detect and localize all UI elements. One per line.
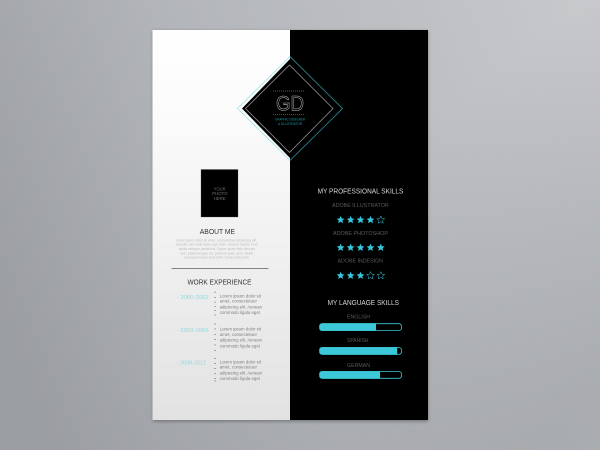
about me text bbox=[176, 238, 258, 260]
job text: first: adipiscing elit. Aenean bbox=[220, 304, 262, 310]
paper shadow bbox=[153, 31, 428, 422]
job text: third: commodo ligula eget bbox=[220, 376, 261, 382]
job text: third bbox=[220, 359, 262, 382]
job text: second: commodo ligula eget bbox=[220, 343, 261, 349]
about me text: Lorem ipsum dolor sit amet, consectetuer adipiscing elit. bbox=[176, 238, 257, 242]
logo tagline: GRAPHIC DESIGNER bbox=[275, 118, 306, 122]
logo diamond: & ILLUSTRATOR bbox=[278, 122, 303, 126]
stars: illustrator 4 of 5 bbox=[337, 216, 385, 223]
heading: about me: ABOUT ME bbox=[200, 227, 235, 236]
bar: german bbox=[319, 371, 402, 379]
photo placeholder: HERE bbox=[214, 196, 226, 201]
label: adobe photoshop: ADOBE PHOTOSHOP bbox=[333, 231, 388, 237]
stars: photoshop 5 of 5 bbox=[337, 244, 385, 251]
label: adobe illustrator: ADOBE ILLUSTRATOR bbox=[332, 203, 389, 209]
stars: indesign 3 of 5 bbox=[337, 272, 385, 279]
about me text: sociis natoque penatibus. Donec quam felis ultricies bbox=[179, 247, 255, 251]
job text: third: adipiscing elit. Aenean bbox=[220, 370, 262, 376]
job text: third: amet, consectetuer bbox=[220, 365, 257, 371]
job text: second: amet, consectetuer bbox=[220, 332, 257, 338]
about me text: nec, pellentesque eu, pretium quis, sem. Nulla bbox=[180, 251, 253, 255]
job text: first: Lorem ipsum dolor sit bbox=[220, 293, 262, 299]
label: spanish: SPANISH bbox=[347, 338, 368, 344]
job text: second bbox=[220, 327, 262, 349]
heading: professional skills: MY PROFESSIONAL SKILLS bbox=[318, 186, 404, 196]
label: german: GERMAN bbox=[347, 363, 370, 369]
label: english: ENGLISH bbox=[347, 314, 370, 320]
bar: english bbox=[319, 323, 402, 331]
logo diamond bbox=[238, 56, 342, 160]
job text: second: adipiscing elit. Aenean bbox=[220, 338, 262, 344]
divider bbox=[172, 267, 268, 270]
job text: second: Lorem ipsum dolor sit bbox=[220, 327, 262, 333]
about me text: Aenean commodo ligula eget dolor. Aenean massa. Cum bbox=[176, 243, 258, 247]
timeline dots bbox=[214, 292, 216, 381]
panel: right black column bbox=[290, 30, 428, 420]
job text: first: commodo ligula eget bbox=[220, 310, 261, 316]
job text: first: amet, consectetuer bbox=[220, 299, 257, 305]
panel: left white column bbox=[152, 30, 290, 420]
label: adobe indesign: ADOBE INDESIGN bbox=[338, 259, 383, 265]
job text: first bbox=[220, 293, 262, 316]
photo placeholder: YOUR bbox=[214, 187, 226, 192]
photo placeholder bbox=[201, 170, 238, 217]
date: first job: - 2000-2002 bbox=[177, 295, 209, 301]
heading: language skills: MY LANGUAGE SKILLS bbox=[328, 298, 399, 307]
date: second job: - 2003-2006 bbox=[177, 328, 209, 334]
date: third job: - 2008-2012 bbox=[177, 361, 206, 367]
bar: spanish bbox=[319, 347, 402, 355]
job text: third: Lorem ipsum dolor sit bbox=[220, 359, 262, 365]
heading: work experience: WORK EXPERIENCE bbox=[188, 277, 252, 286]
about me text: consequat massa quis enim. Donec pede justo. bbox=[184, 256, 250, 260]
photo placeholder: PHOTO bbox=[212, 191, 228, 196]
logo initials: GD bbox=[276, 92, 304, 116]
